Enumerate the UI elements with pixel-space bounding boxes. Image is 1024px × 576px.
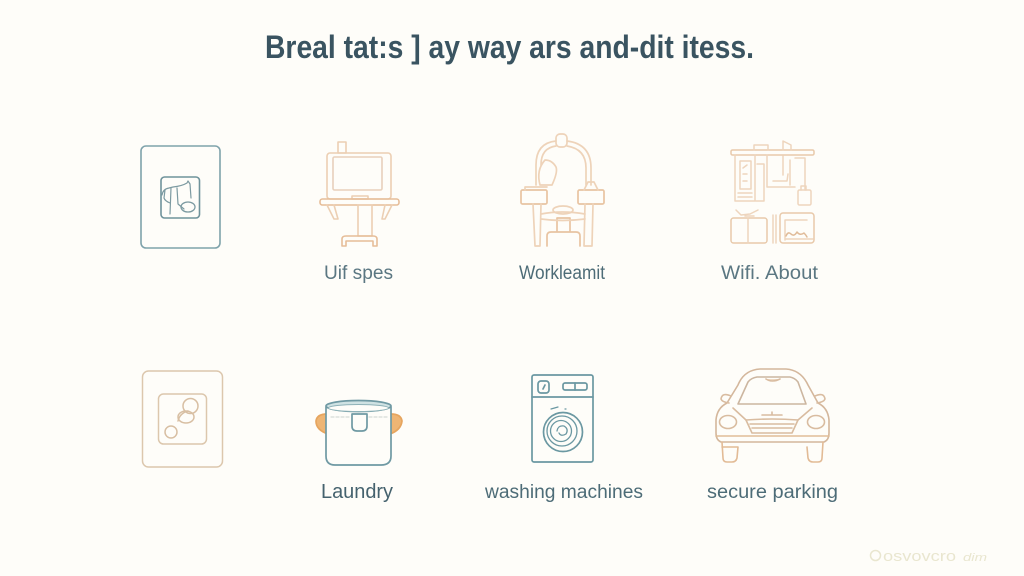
label: desk: Uif spes: [324, 263, 393, 284]
title: Breal tat:s ] ay way ars and-dit itess.: [265, 29, 754, 65]
watermark: dim: [963, 552, 987, 564]
label: shelves: Wifi. About: [721, 263, 819, 284]
watermark: [870, 548, 987, 565]
label: washing machines: washing machines: [484, 482, 643, 503]
label: secure parking: secure parking: [707, 482, 838, 503]
icon: framed note tile: [141, 146, 220, 248]
label: workstation: Workleamit: [519, 263, 606, 284]
label: laundry: Laundry: [321, 481, 393, 503]
watermark: osvovcro: [883, 548, 956, 565]
icon: washing machine: [532, 375, 593, 462]
icon: workstation chair: [521, 134, 604, 246]
icon: car: [716, 369, 829, 462]
icon: framed circles tile: [142, 371, 222, 467]
icon: laundry pot: [316, 400, 402, 465]
icon: desk with monitor: [320, 142, 399, 246]
icon: shelves and cabinets: [731, 141, 814, 243]
